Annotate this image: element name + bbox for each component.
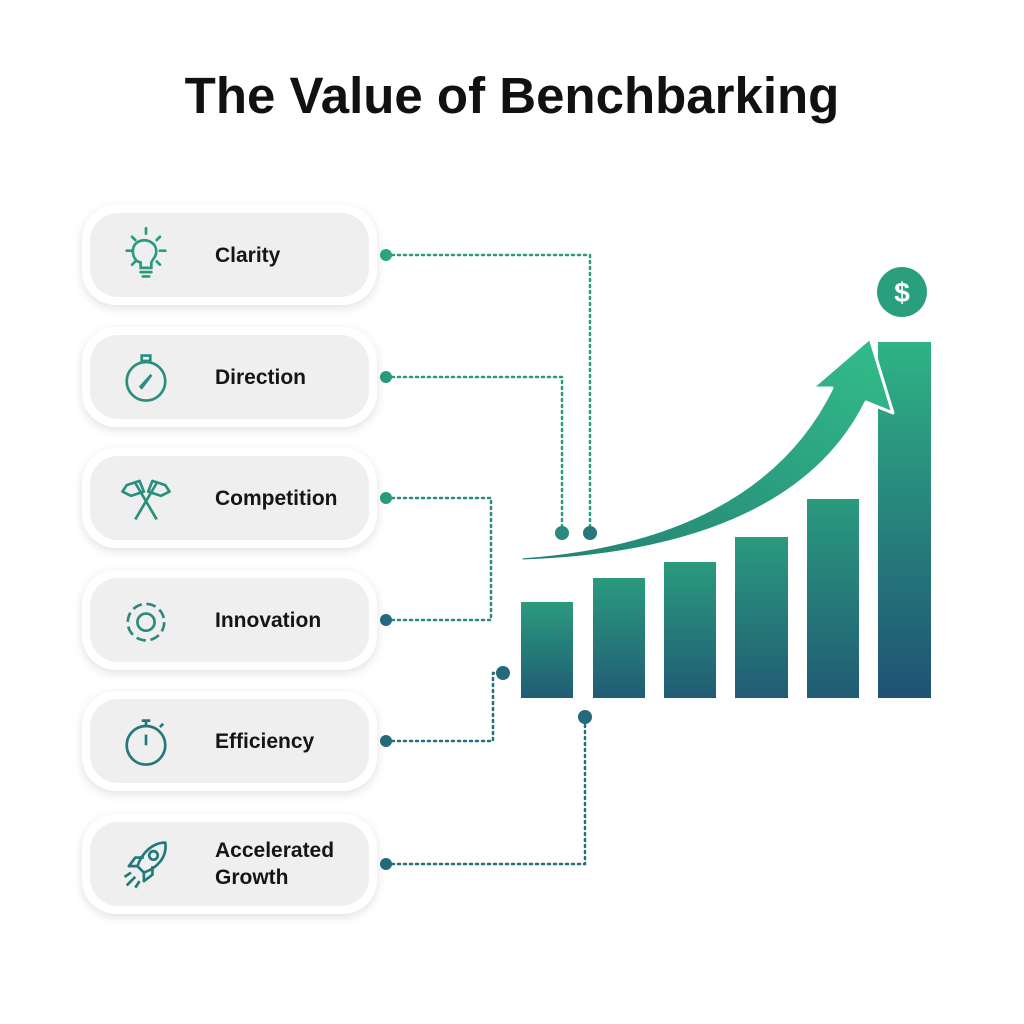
connector dots <box>380 249 597 870</box>
label: Direction <box>215 366 306 388</box>
icon: light bulb <box>125 226 167 278</box>
card: Innovation <box>82 570 377 670</box>
icon: flags <box>121 480 171 520</box>
label: Competition <box>215 486 337 510</box>
label <box>215 839 334 889</box>
icon: dollar coin <box>877 267 927 317</box>
icon: compass <box>125 354 167 402</box>
card: Efficiency <box>82 691 377 791</box>
label: Accelerated <box>215 839 334 862</box>
label: Growth <box>215 866 288 889</box>
icon: stopwatch <box>125 719 167 766</box>
title: The Value of Benchbarking <box>185 67 839 124</box>
label: Clarity <box>215 244 280 266</box>
icon: dollar coin: $ <box>894 277 910 308</box>
card: Clarity <box>82 205 377 305</box>
icon: gear <box>126 602 166 642</box>
label: Innovation <box>215 608 321 632</box>
growth arrow <box>521 338 893 561</box>
label: Efficiency <box>215 730 314 752</box>
card: Direction <box>82 327 377 427</box>
card: Accelerated Growth <box>82 814 377 914</box>
bar chart <box>521 342 931 698</box>
connector lines <box>386 255 590 864</box>
card: Competition <box>82 448 377 548</box>
icon: rocket <box>124 841 167 888</box>
